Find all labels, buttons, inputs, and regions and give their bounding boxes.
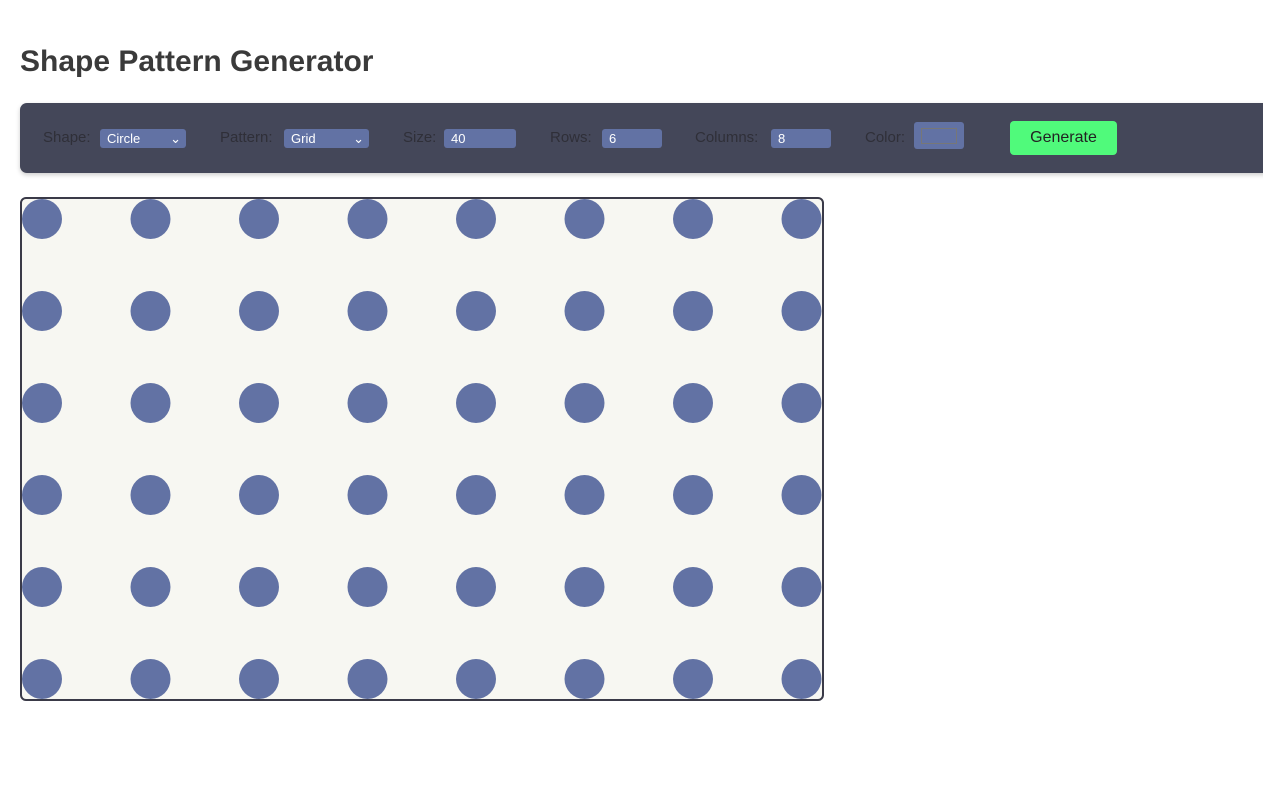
title: Shape Pattern Generator bbox=[20, 45, 373, 78]
input: columns: 8 bbox=[778, 131, 785, 146]
button: generate bbox=[1010, 121, 1117, 155]
panel: controls toolbar bbox=[20, 103, 1263, 173]
input: rows bbox=[602, 129, 662, 148]
label: size: Size: bbox=[403, 129, 436, 146]
label: rows: Rows: bbox=[550, 129, 592, 146]
select: shape: Circle bbox=[107, 131, 140, 146]
input: rows: 6 bbox=[609, 131, 616, 146]
select: pattern: Grid bbox=[291, 131, 316, 146]
label: pattern: Pattern: bbox=[220, 129, 273, 146]
select: shape bbox=[100, 129, 186, 148]
select: pattern bbox=[284, 129, 369, 148]
canvas: circle grid pattern bbox=[20, 197, 824, 701]
input: size bbox=[444, 129, 516, 148]
select: pattern: ⌄ bbox=[353, 131, 364, 146]
input: color swatch bbox=[914, 122, 964, 149]
select: shape: ⌄ bbox=[170, 131, 181, 146]
input: columns bbox=[771, 129, 831, 148]
input: size: 40 bbox=[451, 131, 465, 146]
button: generate: Generate bbox=[1030, 129, 1097, 146]
label: columns: Columns: bbox=[695, 129, 758, 146]
label: color: Color: bbox=[865, 129, 905, 146]
label: shape: Shape: bbox=[43, 129, 91, 146]
